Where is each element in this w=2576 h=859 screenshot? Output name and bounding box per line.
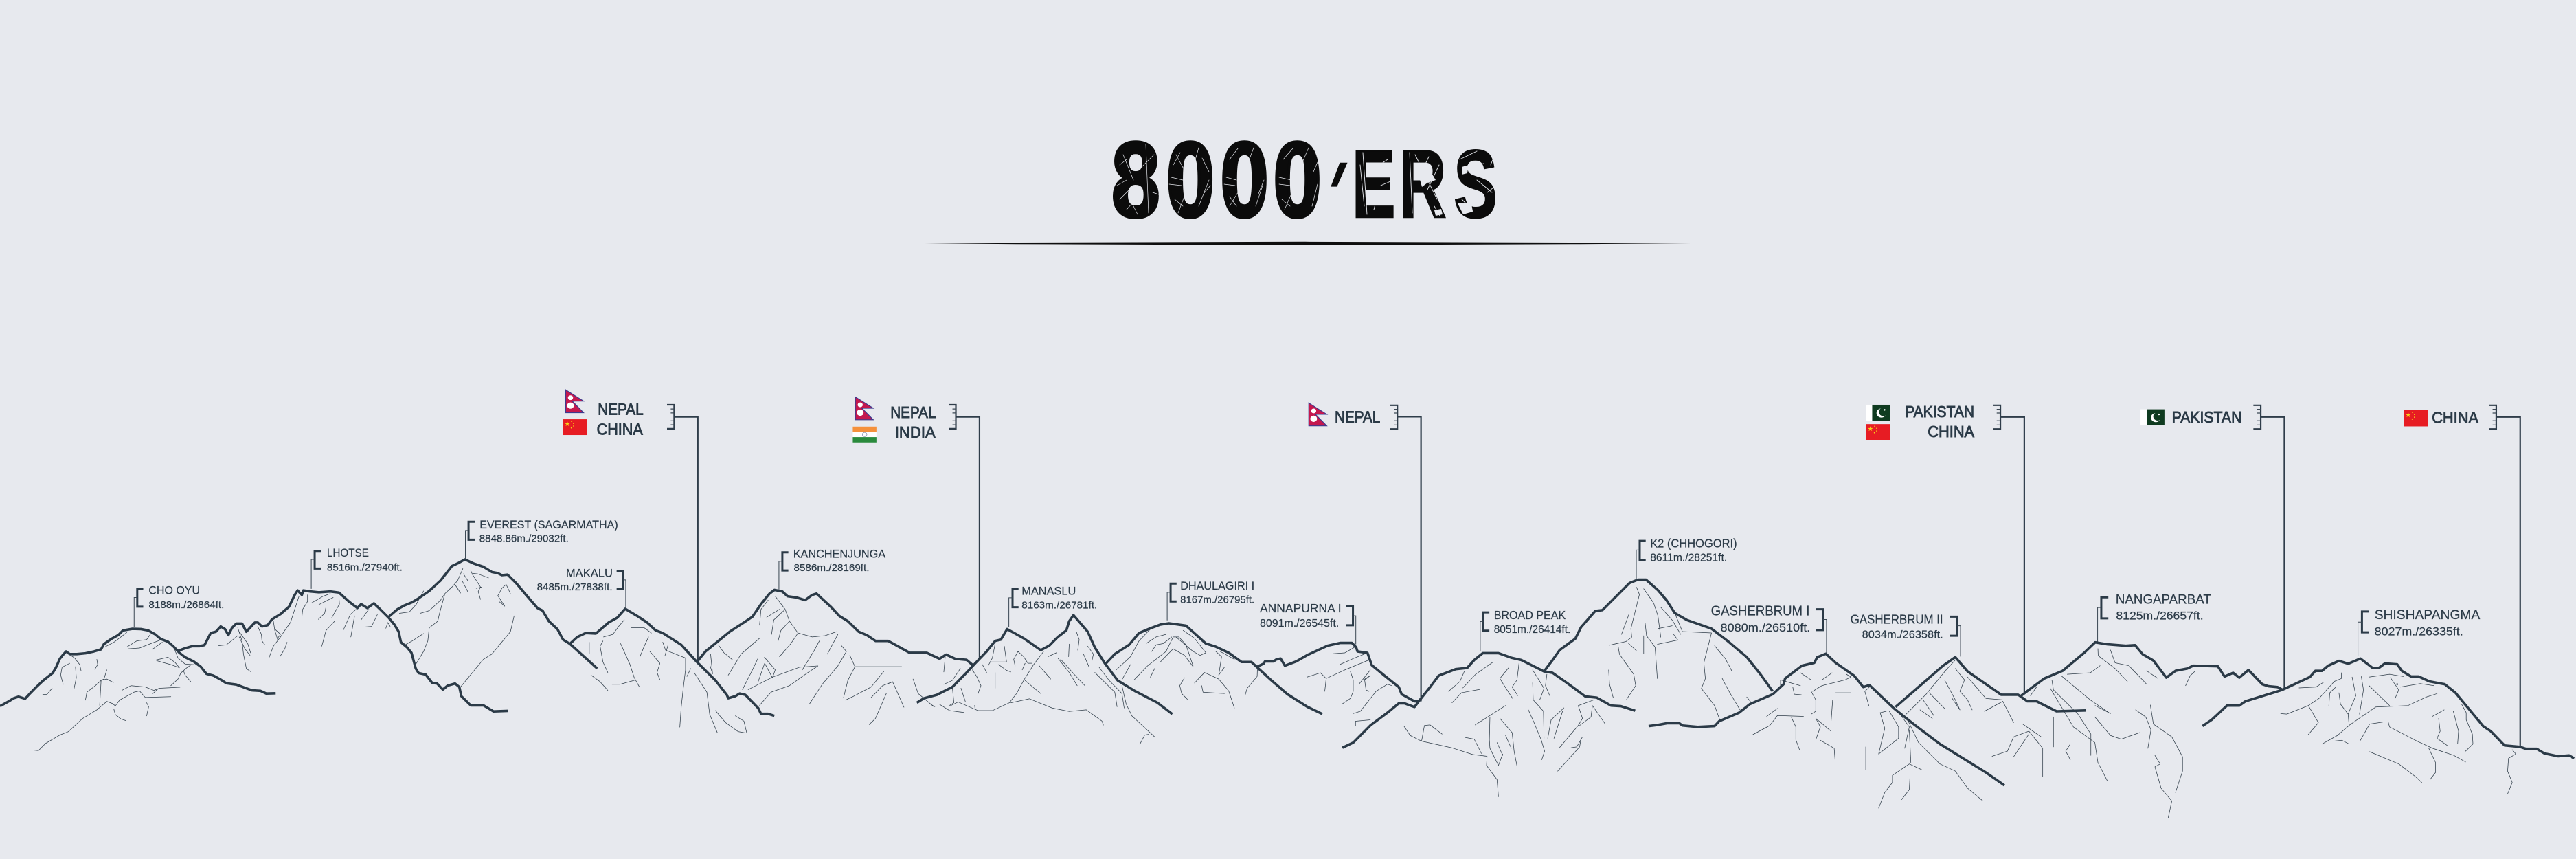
callout: Nepal and India: NEPAL xyxy=(890,403,936,421)
label: Kanchenjunga: KANCHENJUNGA xyxy=(793,548,886,561)
label: Nanga Parbat: 8125m./26657ft. xyxy=(2116,610,2204,623)
label: Everest: EVEREST (SAGARMATHA) xyxy=(479,518,618,531)
mountain: Lhotse xyxy=(178,590,508,711)
mountain: Shishapangma xyxy=(2202,658,2574,794)
label: Cho Oyu xyxy=(134,584,224,627)
label: Gasherbrum II: 8034m./26358ft. xyxy=(1862,629,1943,640)
callout: Nepal and India: INDIA xyxy=(895,423,936,441)
mountain: Gasherbrum II xyxy=(1895,657,2086,777)
callout: Nepal and China xyxy=(563,390,698,661)
label: Nanga Parbat xyxy=(2098,592,2211,641)
mountain: Broad Peak xyxy=(1342,653,1635,796)
callout: Pakistan and China xyxy=(1866,403,2024,694)
title: 8000'ERS xyxy=(1111,121,1498,249)
callout: Pakistan: PAKISTAN xyxy=(2172,408,2241,426)
label: Shishapangma: 8027m./26335ft. xyxy=(2375,625,2463,638)
callout: Pakistan xyxy=(2140,405,2284,690)
callout: China xyxy=(2404,405,2520,747)
label: Manaslu xyxy=(1009,585,1097,627)
callout: Nepal and China: CHINA xyxy=(597,421,643,438)
mountain range xyxy=(0,559,2574,818)
mountain: Kanchenjunga xyxy=(697,590,973,724)
label: Gasherbrum I xyxy=(1711,603,1827,654)
label: Dhaulagiri I: 8167m./26795ft. xyxy=(1180,595,1254,606)
label: Makalu: MAKALU xyxy=(566,566,613,579)
title: 8000'ERS: ' xyxy=(1302,142,1359,249)
label: Dhaulagiri I: DHAULAGIRI I xyxy=(1180,579,1254,592)
label: Dhaulagiri I xyxy=(1167,579,1254,621)
callout: Nepal and China: NEPAL xyxy=(598,401,644,419)
label: Gasherbrum I: 8080m./26510ft. xyxy=(1720,621,1810,634)
label: Lhotse xyxy=(311,546,403,589)
label: Gasherbrum I: GASHERBRUM I xyxy=(1711,603,1809,618)
mountain: K2 xyxy=(1544,579,1773,700)
label: Manaslu: MANASLU xyxy=(1021,585,1076,598)
label: Lhotse: LHOTSE xyxy=(327,546,369,559)
label: Cho Oyu: CHO OYU xyxy=(148,584,200,596)
label: Shishapangma xyxy=(2358,607,2480,656)
label: Makalu: 8485m./27838ft. xyxy=(537,582,613,593)
label: Annapurna I: 8091m./26545ft. xyxy=(1260,618,1339,629)
mountain: Annapurna I xyxy=(1256,643,1419,726)
label: Broad Peak: BROAD PEAK xyxy=(1494,608,1566,622)
label: K2 xyxy=(1636,537,1737,579)
label: Cho Oyu: 8188m./26864ft. xyxy=(148,600,224,611)
label: Kanchenjunga xyxy=(779,548,886,590)
label: Manaslu: 8163m./26781ft. xyxy=(1021,601,1097,612)
label: Annapurna I: ANNAPURNA I xyxy=(1260,601,1342,615)
mountain: Dhaulagiri I xyxy=(1105,623,1322,714)
mountain: Makalu xyxy=(570,609,774,733)
title: 8000'ERS: ERS xyxy=(1352,131,1498,238)
callout: Nepal and India xyxy=(852,397,980,658)
mountain: Manaslu xyxy=(917,615,1173,744)
label: Everest xyxy=(466,518,618,559)
label: Everest: 8848.86m./29032ft. xyxy=(479,533,569,544)
label: Makalu xyxy=(537,566,626,609)
title: 8000'ERS: 8000 xyxy=(1111,121,1322,240)
label: K2: 8611m./28251ft. xyxy=(1650,553,1727,564)
label: Broad Peak xyxy=(1480,608,1570,651)
label: Gasherbrum II xyxy=(1851,613,1961,656)
mountain: K2 lower slope xyxy=(1675,613,1752,719)
callout: China: CHINA xyxy=(2432,408,2479,426)
callout: Pakistan and China: PAKISTAN xyxy=(1905,403,1974,421)
label: Shishapangma: SHISHAPANGMA xyxy=(2375,607,2480,623)
label: Gasherbrum II: GASHERBRUM II xyxy=(1851,613,1943,627)
label: Lhotse: 8516m./27940ft. xyxy=(327,562,403,573)
label: K2: K2 (CHHOGORI) xyxy=(1650,537,1737,550)
label: Kanchenjunga: 8586m./28169ft. xyxy=(794,563,870,574)
callout: Pakistan and China: CHINA xyxy=(1928,423,1975,440)
mountain: Nanga Parbat xyxy=(2021,643,2283,818)
label: Nanga Parbat: NANGAPARBAT xyxy=(2116,592,2211,607)
callout: Nepal: NEPAL xyxy=(1335,408,1380,426)
label: Annapurna I xyxy=(1260,601,1356,645)
mountain: Everest xyxy=(389,559,597,687)
mountain: Gasherbrum I xyxy=(1649,654,2004,808)
label: Broad Peak: 8051m./26414ft. xyxy=(1494,624,1570,636)
callout: Nepal xyxy=(1309,403,1421,702)
mountain: Cho Oyu xyxy=(0,629,275,750)
title rule xyxy=(925,242,1691,245)
